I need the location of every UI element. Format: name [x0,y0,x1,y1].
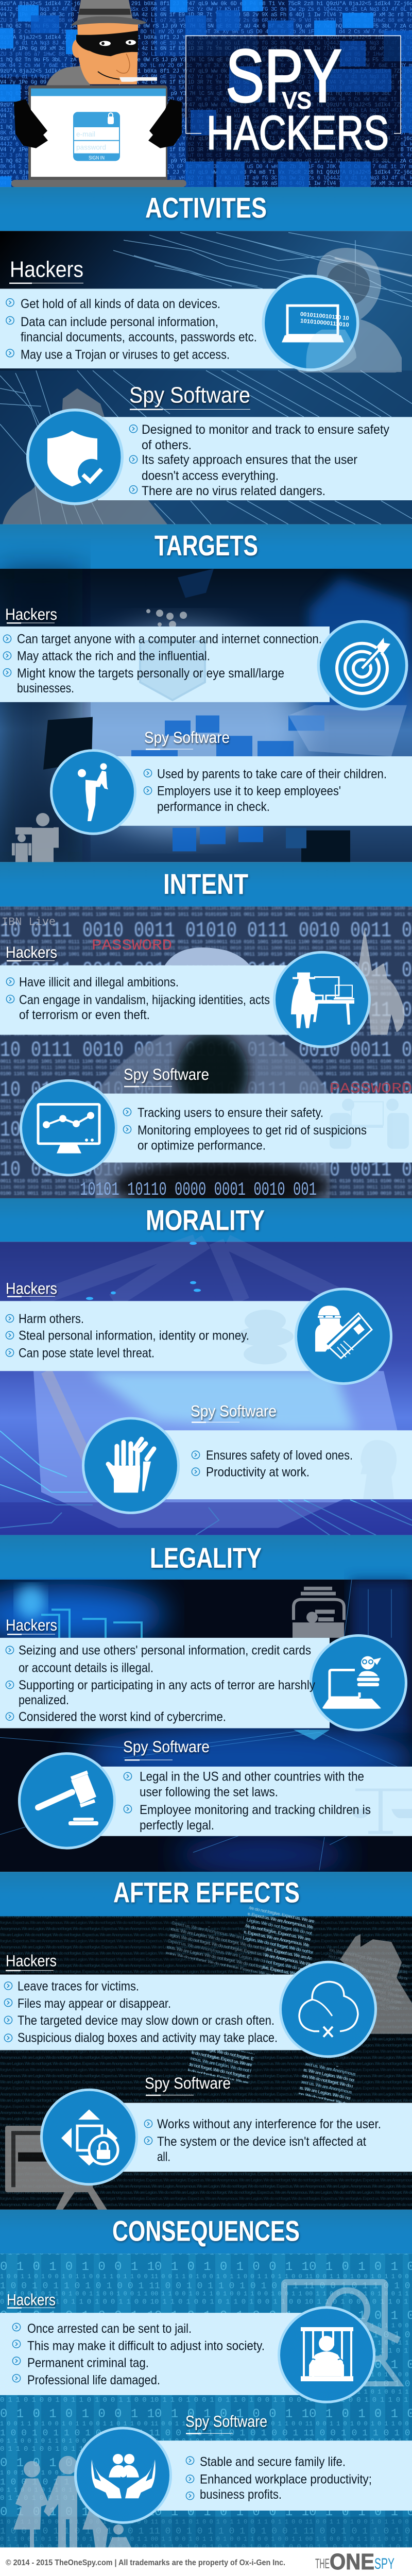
icon: laptop with binary [262,275,359,371]
icon: target with arrow [317,620,408,710]
footer copyright: © 2014 - 2015 TheOneSpy.com | All trademarks are the property of Ox-i-Gen Inc. [6,2558,285,2567]
bullets: spy software targets: Used by parents to take care of their children. [157,767,387,782]
hero background: code rain and blue blocks [0,0,412,187]
bullets: hackers morality: Harm others. [19,1312,84,1326]
icon: laptop with binary: 0010110010110 10 [300,311,349,321]
heading: Hackers: Hackers [6,1952,57,1970]
panel: intent [0,907,412,1211]
logo: TheOneSpy: ONE [330,2549,374,2574]
bullets: spy software activities: doesn't access everything. [142,468,279,483]
morality background: chip and circuit board [0,1242,412,1535]
text panel: spy software consequences [149,2441,412,2511]
bullets: hackers legality: or account details is illegal. [19,1660,153,1675]
bullets: hackers intent [6,975,270,1022]
bullets: hackers after effects: The targeted device may slow down or crash often. [18,2013,274,2028]
text panel: spy software intent [93,1094,412,1162]
bullets: hackers targets [3,632,322,696]
bullets: spy software activities [129,422,390,498]
section band: MORALITY [0,1198,412,1242]
section band: AFTER EFFECTS [0,1872,412,1917]
heading: Spy Software: Spy Software [185,2412,267,2430]
bullets: hackers legality [6,1643,316,1724]
background silhouette: person with folders [293,1587,344,1638]
bullets: spy software consequences: Stable and secure family life. [200,2455,346,2469]
bullets: hackers legality: Considered the worst kind of cybercrime. [19,1710,226,1724]
bullets: spy software targets: Employers use it to keep employees' [157,784,341,798]
illustration: spy at a laptop: SIGN IN [89,155,105,161]
bullets: spy software legality [124,1770,371,1833]
section band: ACTIVITES [0,187,412,231]
bullets: hackers targets: businesses. [17,681,74,696]
bullets: hackers targets: Can target anyone with a computer and internet connection. [17,632,322,647]
text panel: hackers after effects [0,1975,309,2050]
bullets: spy software morality: Productivity at work. [206,1465,310,1479]
illustration: spy at a laptop: e-mail [76,130,95,138]
panel: consequences [0,2253,412,2547]
bullets: hackers consequences: This may make it difficult to adjust into society. [27,2339,265,2353]
bullets: hackers activities: Get hold of all kinds of data on devices. [21,297,220,311]
heading: Hackers: Hackers [6,1616,57,1634]
bullets: spy software targets: performance in check. [157,800,270,814]
bullets: hackers morality: Can pose state level threat. [19,1346,154,1360]
panel: activities [0,231,412,524]
panel: after effects [0,1891,412,2210]
icon: shield with check [26,409,124,505]
bullets: spy software consequences: Enhanced workplace productivity; [200,2472,372,2486]
panel: morality [0,1242,412,1535]
bullets: hackers after effects: Files may appear or disappear. [18,1996,171,2011]
bullets: spy software consequences: business profits. [200,2487,282,2502]
background silhouette: family holding hands [13,2456,131,2547]
icon: laptop and masked hacker [310,1634,407,1731]
logo: TheOneSpy: THE [315,2556,330,2571]
bullets: hackers legality: penalized. [19,1693,69,1707]
text panel: spy software after effects [113,2103,412,2172]
bullets: hackers intent: of terrorism or even theft. [19,1008,150,1022]
after effects background: Anonymous text mask [0,1891,412,2210]
title: vs: vs [282,80,312,115]
icon: arrows with padlock [40,2089,138,2185]
illustration: spy at a laptop [11,0,186,187]
bullets: hackers intent: Have illicit and illegal ambitions. [19,975,179,989]
bullets: hackers after effects: Suspicious dialog boxes and activity may take place. [18,2031,278,2045]
text panel: hackers morality [0,1301,314,1371]
bullets: hackers targets: Might know the targets personally or eye small/large [17,666,284,681]
bullets: spy software morality: Ensures safety of loved ones. [206,1448,353,1463]
text panel: hackers consequences [0,2313,304,2395]
bullets: hackers morality [6,1312,249,1360]
bullets: hackers after effects: Leave traces for victims. [18,1979,139,1993]
watermark: head with lightbulb [360,1440,397,1499]
text panel: hackers targets [0,626,330,702]
bullets: hackers consequences [12,2321,265,2387]
bullets: hackers morality: Steal personal information, identity or money. [19,1329,249,1343]
intent background: binary code with hooded figure: PASSWORD [330,1081,412,1097]
heading: Spy Software: Spy Software [129,383,250,408]
bullets: hackers consequences: Professional life damaged. [27,2373,160,2387]
section band: MORALITY: MORALITY [146,1205,265,1236]
bullets: spy software legality: user following the set laws. [140,1785,278,1799]
text panel: hackers activities [0,289,319,368]
section band: AFTER EFFECTS: AFTER EFFECTS [113,1877,300,1909]
bullets: hackers intent: Can engage in vandalism, hijacking identities, acts [19,993,270,1007]
icon: thief with credit card [295,1288,392,1385]
section band: INTENT: INTENT [163,868,248,900]
logo: TheOneSpy [315,2549,394,2574]
panel: targets [0,569,412,862]
panel: legality [0,1580,412,1875]
text panel: spy software targets [116,756,412,826]
bullets: spy software consequences [186,2455,372,2502]
icon: spy at computer desk [273,951,371,1048]
icon: hands protecting family [74,2427,172,2524]
background silhouette: hacker face shadow [327,262,370,305]
logo: TheOneSpy: SPY [374,2555,394,2572]
intent background: binary code with hooded figure: IBN Live [2,916,56,928]
text panel: spy software activities [98,417,412,500]
background silhouette: safe on tripod [5,2126,107,2210]
legality background: glowing lines [0,1580,412,1875]
watermark: scales of justice [350,1789,412,1834]
section band: CONSEQUENCES [0,2210,412,2253]
bullets: spy software after effects [144,2117,381,2164]
background silhouette: hooded figure [3,388,167,524]
watermark: two people at a meeting [330,1099,409,1149]
text panel: hackers legality [0,1638,330,1728]
bullets: hackers after effects [4,1979,278,2045]
bullets: spy software morality [192,1448,353,1479]
section band: TARGETS [0,524,412,569]
bullets: spy software targets [144,767,387,814]
bullets: hackers activities: Data can include personal information, [21,315,218,329]
consequences background: binary digit columns [0,2253,412,2547]
background silhouette: armed soldier [358,927,404,1035]
section band: LEGALITY: LEGALITY [150,1542,262,1574]
background silhouette: hooded hacker at laptop [297,248,402,372]
watermark: coins [237,1310,294,1364]
bullets: spy software intent: Monitoring employees to get rid of suspicions [138,1123,367,1138]
intent background: binary code with hooded figure: 10101 10110 0000 0001 0010 001 [80,1179,317,1200]
icon: parent lifting child [50,749,136,835]
heading: Hackers: Hackers [5,605,57,623]
bullets: spy software intent: or optimize performance. [138,1139,266,1153]
bullets: spy software after effects: Works without any interference for the user. [157,2117,381,2131]
icon: monitor with line chart [20,1079,117,1176]
background silhouette: adult and child [12,813,59,862]
intent background: binary code with hooded figure: PASSWORD [92,937,172,954]
bullets: spy software legality: Employee monitoring and tracking children is [140,1803,371,1817]
heading: Hackers: Hackers [6,943,57,961]
watermark: shield [140,641,205,700]
section band: LEGALITY [0,1535,412,1580]
title: SPY: SPY [226,34,342,118]
background silhouette: attacker with knife [340,1934,412,2034]
targets background: blue cubes [0,569,412,862]
heading: Spy Software: Spy Software [123,1737,210,1756]
bullets: spy software intent [123,1106,367,1153]
intent background: binary code with hooded figure [0,907,412,1211]
bullets: spy software activities: There are no virus related dangers. [142,484,325,498]
bullets: spy software intent: Tracking users to ensure their safety. [138,1106,323,1120]
heading: Hackers: Hackers [10,257,83,282]
bullets: spy software after effects: The system or the device isn't affected at [157,2134,366,2149]
bullets: spy software after effects: all. [157,2150,170,2164]
icon: laptop with binary: 101010000111010 [300,318,349,328]
heading: Hackers: Hackers [7,2290,56,2309]
hero: spy illustration and title [0,0,412,187]
bullets: hackers legality: Seizing and use others' personal information, credit cards [19,1643,311,1658]
section band: ACTIVITES: ACTIVITES [145,192,267,224]
bullets: spy software legality: Legal in the US and other countries with the [140,1770,364,1784]
section band: TARGETS: TARGETS [154,530,258,562]
bullets: spy software legality: perfectly legal. [140,1818,214,1833]
activities background: circuit lines [0,231,412,524]
heading: Hackers: Hackers [6,1279,57,1297]
bullets: hackers targets: May attack the rich and the influential. [17,649,210,663]
footer [0,2547,412,2576]
bullets: hackers legality: Supporting or participating in any acts of terror are harshly [19,1678,316,1692]
text panel: spy software morality [154,1430,412,1499]
heading: Spy Software: Spy Software [191,1402,277,1420]
bullets: hackers consequences: Permanent criminal tag. [27,2355,149,2370]
text panel: hackers intent [0,965,288,1035]
heading: Spy Software: Spy Software [144,728,230,747]
section band: INTENT [0,862,412,907]
bullets: spy software activities: Designed to monitor and track to ensure safety [142,422,390,437]
heading: Spy Software: Spy Software [145,2074,231,2092]
icon: cloud with X [279,1961,377,2058]
bullets: spy software activities: of others. [142,438,192,452]
bullets: hackers activities [6,297,257,362]
icon: gavel [18,1752,116,1850]
illustration: spy at a laptop: password [76,143,106,151]
bullets: hackers activities: May use a Trojan or viruses to get access. [21,347,230,362]
bullets: spy software activities: Its safety approach ensures that the user [142,453,357,467]
title frame [186,36,401,133]
heading: Spy Software: Spy Software [124,1065,209,1083]
text panel: spy software legality [93,1767,412,1836]
icon: prisoner behind bars [278,2306,375,2403]
bullets: hackers consequences: Once arrested can be sent to jail. [27,2321,192,2336]
background silhouette: laptop with magnifier and bug [284,2282,399,2384]
bullets: hackers activities: financial documents, accounts, passwords etc. [21,330,257,345]
section band: CONSEQUENCES: CONSEQUENCES [112,2215,300,2247]
icon: gloves [82,1417,180,1514]
